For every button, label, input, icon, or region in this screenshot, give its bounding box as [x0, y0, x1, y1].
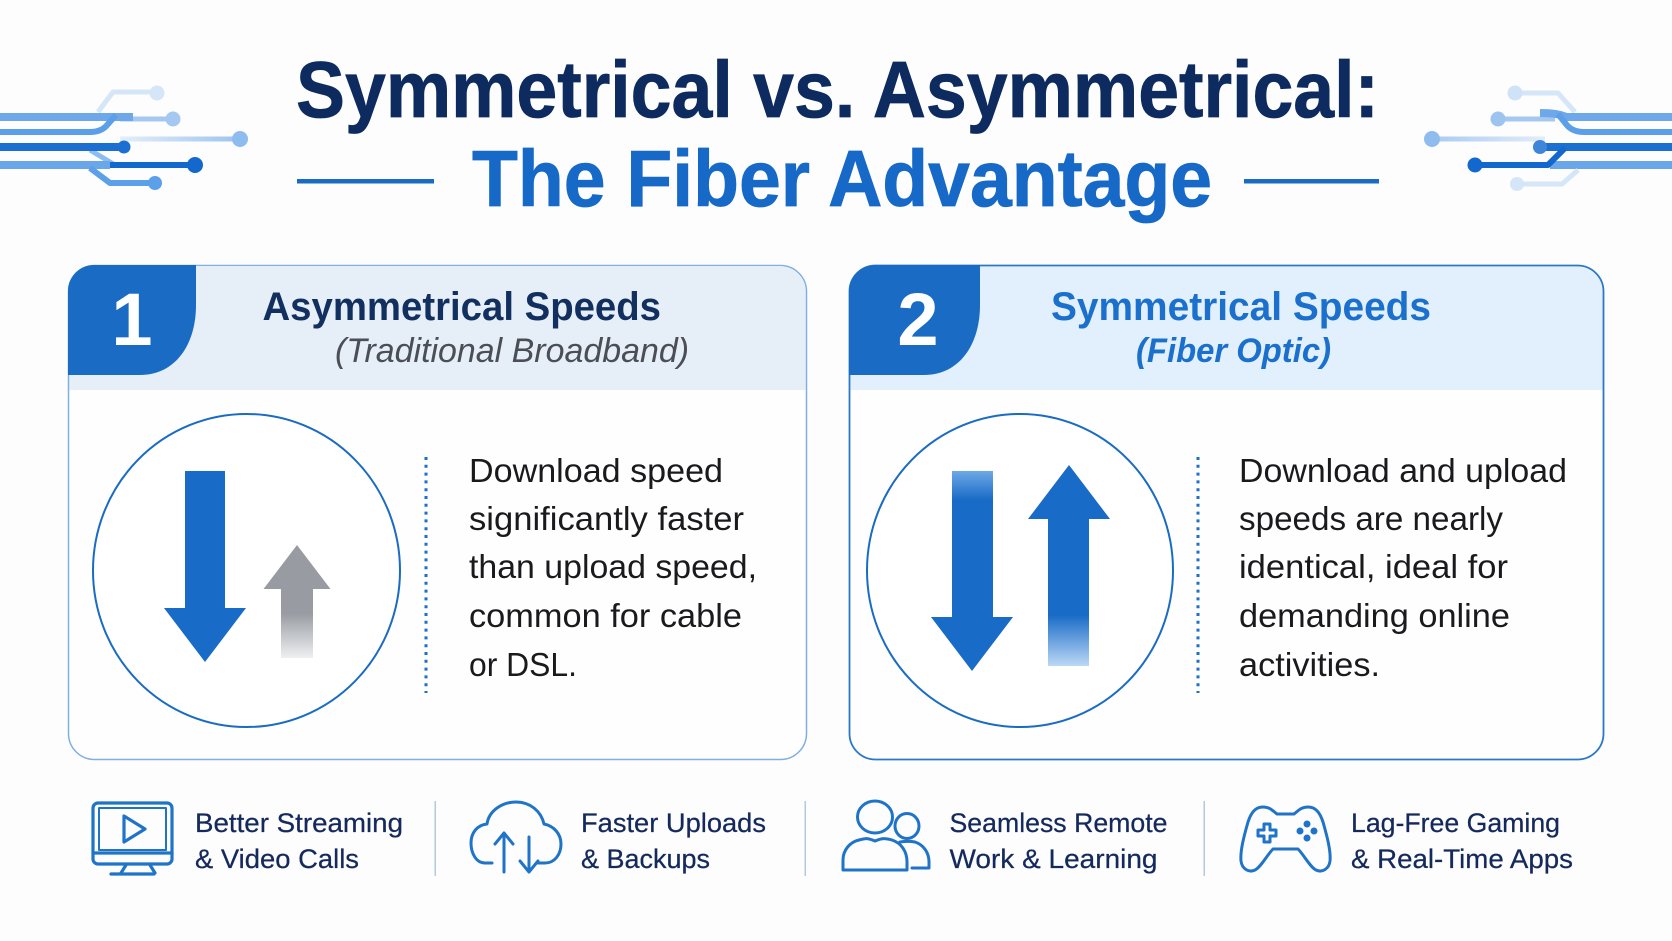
icon: game controller	[1241, 807, 1330, 871]
controller buttons	[1296, 820, 1318, 842]
panel description	[1239, 452, 1567, 683]
panel description: than upload speed,	[469, 548, 757, 585]
title	[296, 45, 1379, 223]
number badge: 1	[111, 278, 153, 361]
panel description: speeds are nearly	[1239, 500, 1503, 537]
title rule: right	[1244, 179, 1379, 184]
panel description: significantly faster	[469, 500, 744, 537]
panel header band	[850, 266, 1602, 390]
title: The Fiber Advantage	[472, 134, 1212, 223]
panel description: or DSL.	[469, 646, 577, 683]
number badge	[849, 265, 980, 375]
benefit label	[581, 808, 766, 874]
divider	[804, 801, 806, 876]
number badge: 2	[897, 278, 939, 361]
icon: two people	[843, 801, 929, 870]
panel header band	[70, 266, 806, 390]
panel description	[469, 452, 757, 683]
icon: symmetric arrows in circle	[867, 414, 1173, 727]
dotted divider	[424, 457, 428, 693]
benefit label: Work & Learning	[950, 844, 1158, 874]
icon: asymmetric arrows in circle	[93, 414, 400, 727]
benefit label: Seamless Remote	[950, 808, 1168, 838]
divider	[434, 801, 436, 876]
decoration: right fiber circuit lines	[1424, 86, 1672, 191]
title: Symmetrical vs. Asymmetrical:	[296, 45, 1379, 134]
benefit label: Lag-Free Gaming	[1351, 808, 1560, 838]
number badge	[68, 265, 196, 375]
dotted divider	[1196, 457, 1200, 693]
panel subheading: (Traditional Broadband)	[335, 332, 689, 370]
icon: monitor with play	[93, 803, 172, 874]
panel description: demanding online	[1239, 597, 1510, 634]
benefit: uploads	[471, 802, 766, 874]
benefit label: & Video Calls	[195, 844, 359, 874]
divider	[1204, 801, 1205, 876]
benefit label: Faster Uploads	[581, 808, 766, 838]
benefit label	[195, 808, 403, 874]
panel description: activities.	[1239, 646, 1380, 683]
benefit label: & Backups	[581, 844, 710, 874]
panel subheading: (Fiber Optic)	[1136, 332, 1331, 370]
benefit: gaming	[1241, 807, 1573, 874]
panel heading: Symmetrical Speeds	[1051, 285, 1431, 329]
decoration: left fiber circuit lines	[0, 86, 248, 190]
panel: symmetrical speeds	[849, 265, 1604, 760]
panel description: common for cable	[469, 597, 742, 634]
panel description: Download speed	[469, 452, 723, 489]
icon: cloud with arrows	[471, 802, 561, 872]
benefit: streaming	[93, 803, 403, 874]
title rule: left	[297, 179, 434, 184]
benefit: remote work	[843, 801, 1168, 874]
panel description: Download and upload	[1239, 452, 1567, 489]
benefit label	[1351, 808, 1573, 874]
panel: asymmetrical speeds	[68, 265, 806, 760]
benefit label	[950, 808, 1168, 874]
panel description: identical, ideal for	[1239, 548, 1508, 585]
panel heading: Asymmetrical Speeds	[262, 285, 661, 329]
benefit label: Better Streaming	[195, 808, 403, 838]
benefit label: & Real-Time Apps	[1351, 844, 1573, 874]
